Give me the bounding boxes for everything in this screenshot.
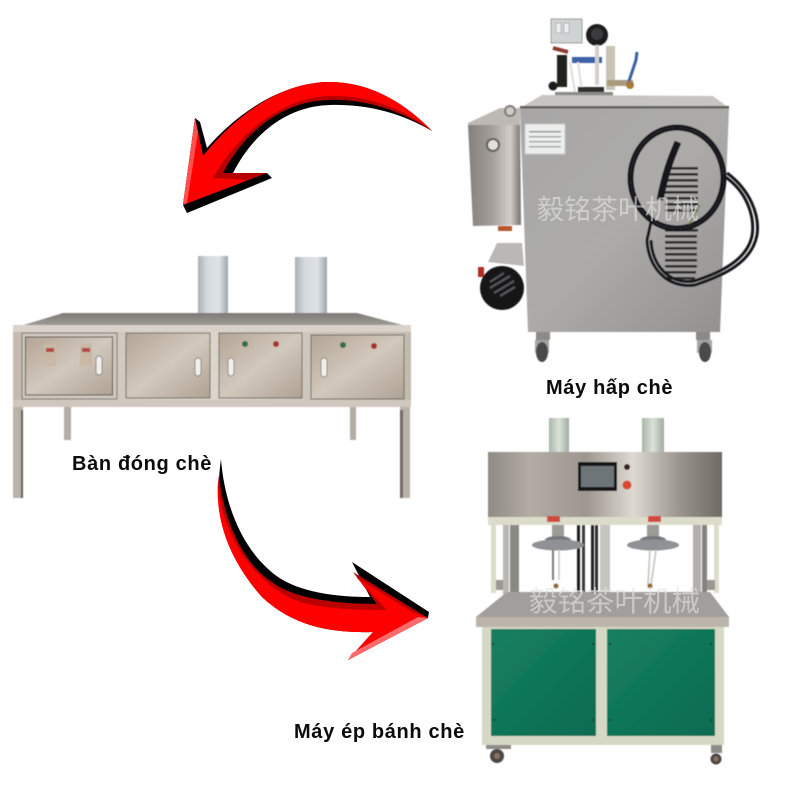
photo: packing table <box>13 256 411 498</box>
label: tea cake press: Máy ép bánh chè <box>294 721 465 743</box>
label: steam boiler: Máy hấp chè <box>546 377 673 399</box>
indicator buttons <box>622 464 632 490</box>
door 2 <box>126 333 210 398</box>
table frame and legs <box>13 325 411 498</box>
arrow: from packing table to press <box>218 459 429 660</box>
vent slats <box>664 167 698 280</box>
boiler top <box>520 95 729 108</box>
top plumbing and gauges <box>548 19 637 97</box>
photo: steam boiler <box>468 19 758 362</box>
cylinder left <box>197 256 229 318</box>
table top <box>17 313 410 327</box>
cable coil <box>629 126 758 285</box>
green panel left <box>491 629 596 736</box>
door 3 with lamps <box>219 333 302 398</box>
photo: tea cake press <box>476 418 729 764</box>
columns and rods <box>503 525 707 614</box>
arrow: from steamer to packing table <box>183 82 432 213</box>
label: packing table: Bàn đóng chè <box>72 453 212 475</box>
top cylinders <box>549 418 664 452</box>
touch screen <box>578 462 617 491</box>
door 4 with lamps <box>311 335 404 399</box>
side water tank <box>468 106 521 231</box>
press disc right <box>627 525 679 588</box>
stainless hood <box>488 452 722 517</box>
door 1 with controllers <box>22 333 117 399</box>
caster left <box>535 332 550 362</box>
caster right <box>710 745 722 764</box>
cylinder right <box>294 257 328 318</box>
caster right <box>696 332 712 362</box>
press disc left <box>532 525 584 588</box>
base frame <box>482 627 724 745</box>
nameplate <box>525 124 565 154</box>
watermark on boiler: 毅铭茶叶机械 <box>537 195 699 225</box>
green panel right <box>607 629 715 736</box>
table top <box>476 592 729 627</box>
boiler body <box>520 108 729 332</box>
caster left <box>486 745 511 763</box>
beam <box>488 516 722 525</box>
watermark on press: 毅铭茶叶机械 <box>529 586 700 618</box>
water pump motor <box>478 243 524 310</box>
side brackets <box>491 525 719 593</box>
